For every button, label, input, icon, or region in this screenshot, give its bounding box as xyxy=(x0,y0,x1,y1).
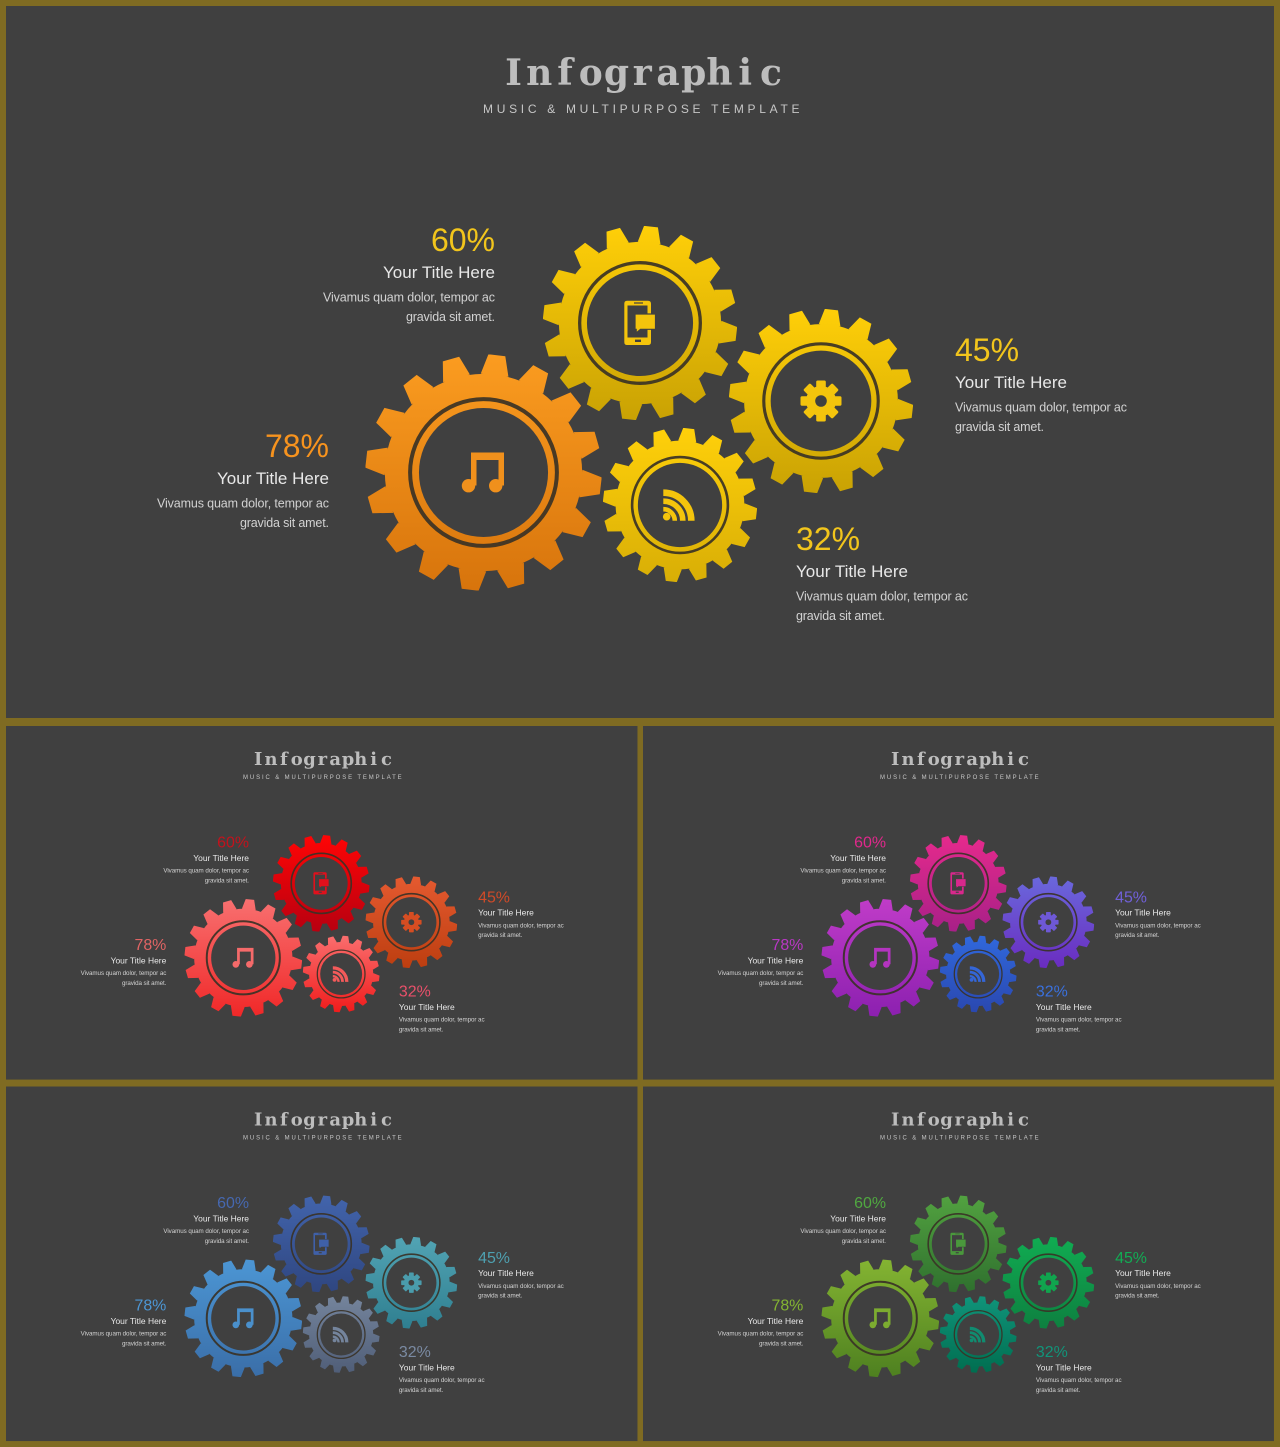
label: 45%: 45% xyxy=(478,889,510,906)
label: 32%: 32% xyxy=(1036,1344,1068,1361)
label: 78%: Your Title Here xyxy=(217,469,329,488)
panel: main yellow and orange gears xyxy=(6,6,1274,718)
label: 32%: 32% xyxy=(399,1344,431,1361)
label: 32% xyxy=(1036,983,1122,1033)
label: 60%: Your Title Here xyxy=(193,1213,249,1223)
label: 32%: Your Title Here xyxy=(1036,1362,1092,1372)
label: 78% xyxy=(81,937,167,987)
subtitle: MUSIC & MULTIPURPOSE TEMPLATE xyxy=(243,1135,402,1141)
gear: settings xyxy=(1003,1237,1094,1329)
label: 60%: Your Title Here xyxy=(193,853,249,863)
label: 78% xyxy=(718,937,804,987)
label: 78%: gravida sit amet. xyxy=(122,1340,167,1347)
label: 78%: Your Title Here xyxy=(111,1316,167,1326)
label: 32%: gravida sit amet. xyxy=(399,1026,444,1033)
label: 60%: Your Title Here xyxy=(383,263,495,282)
label: 32%: gravida sit amet. xyxy=(399,1387,444,1394)
label: 45%: Vivamus quam dolor, tempor ac xyxy=(478,922,564,929)
title: Infographic xyxy=(254,1109,392,1130)
label: 60% xyxy=(323,222,495,324)
label: 78%: 78% xyxy=(771,937,803,954)
label: 32%: Your Title Here xyxy=(399,1002,455,1012)
label: 60%: Vivamus quam dolor, tempor ac xyxy=(163,1228,249,1235)
label: 45%: 45% xyxy=(1115,1250,1147,1267)
label: 45%: gravida sit amet. xyxy=(1115,932,1160,939)
gear: music xyxy=(366,354,602,590)
label: 45% xyxy=(955,332,1127,434)
subtitle: MUSIC & MULTIPURPOSE TEMPLATE xyxy=(483,102,800,116)
label: 32%: 32% xyxy=(796,521,860,557)
label: 60%: Your Title Here xyxy=(830,1213,886,1223)
gear: settings xyxy=(366,1237,457,1329)
title: Infographic xyxy=(891,1109,1029,1130)
gear: settings xyxy=(1003,876,1094,968)
label: 78%: 78% xyxy=(265,428,329,464)
label: 32%: 32% xyxy=(1036,983,1068,1000)
gear: rss xyxy=(303,936,380,1012)
label: 60%: 60% xyxy=(217,835,249,852)
label: 78%: 78% xyxy=(134,937,166,954)
label: 60%: Vivamus quam dolor, tempor ac xyxy=(323,290,495,304)
gear: music xyxy=(185,899,302,1017)
label: 32%: Vivamus quam dolor, tempor ac xyxy=(399,1377,485,1384)
panel: magenta and blue gears xyxy=(643,726,1274,1080)
label: 78%: Vivamus quam dolor, tempor ac xyxy=(718,970,803,977)
label: 45%: Your Title Here xyxy=(955,373,1067,392)
label: 32% xyxy=(796,521,968,623)
label: 32% xyxy=(1036,1344,1122,1394)
label: 45% xyxy=(1115,889,1201,939)
label: 60%: 60% xyxy=(217,1195,249,1212)
label: 78%: gravida sit amet. xyxy=(122,980,167,987)
label: 78% xyxy=(81,1298,167,1347)
label: 60% xyxy=(800,835,886,884)
label: 45% xyxy=(1115,1250,1201,1300)
panel: red gears xyxy=(6,726,637,1080)
title: Infographic xyxy=(891,749,1029,770)
gear: phone xyxy=(273,1196,370,1292)
panel: green gears xyxy=(643,1086,1274,1441)
panel: blue gears xyxy=(6,1086,637,1441)
label: 32%: Vivamus quam dolor, tempor ac xyxy=(399,1017,485,1024)
label: 32%: Your Title Here xyxy=(399,1362,455,1372)
label: 60%: gravida sit amet. xyxy=(842,1238,886,1245)
label: 78%: gravida sit amet. xyxy=(759,980,804,987)
label: 60%: gravida sit amet. xyxy=(406,310,495,324)
label: 45%: Your Title Here xyxy=(478,1268,534,1278)
label: 60%: gravida sit amet. xyxy=(842,877,886,884)
gear: phone xyxy=(273,835,370,932)
label: 60%: gravida sit amet. xyxy=(205,877,249,884)
label: 60%: 60% xyxy=(854,835,886,852)
label: 78%: 78% xyxy=(134,1298,166,1315)
label: 45%: Your Title Here xyxy=(1115,1268,1171,1278)
subtitle: MUSIC & MULTIPURPOSE TEMPLATE xyxy=(243,775,402,781)
label: 45%: Vivamus quam dolor, tempor ac xyxy=(955,400,1127,414)
gear: settings xyxy=(366,876,457,968)
label: 32%: Vivamus quam dolor, tempor ac xyxy=(796,590,968,604)
label: 60% xyxy=(163,835,249,884)
label: 60% xyxy=(163,1195,249,1245)
label: 78% xyxy=(718,1298,804,1347)
label: 78%: Vivamus quam dolor, tempor ac xyxy=(157,496,329,510)
label: 78%: gravida sit amet. xyxy=(759,1340,804,1347)
label: 45%: Your Title Here xyxy=(1115,908,1171,918)
label: 60%: 60% xyxy=(431,222,495,258)
gear: music xyxy=(822,899,939,1017)
label: 32%: 32% xyxy=(399,983,431,1000)
subtitle: MUSIC & MULTIPURPOSE TEMPLATE xyxy=(880,775,1039,781)
label: 45% xyxy=(478,889,564,939)
gear: phone xyxy=(543,226,737,420)
label: 78%: Vivamus quam dolor, tempor ac xyxy=(81,970,166,977)
label: 32%: gravida sit amet. xyxy=(796,609,885,623)
label: 45%: Vivamus quam dolor, tempor ac xyxy=(1115,922,1201,929)
label: 45%: gravida sit amet. xyxy=(478,1293,523,1300)
gear: music xyxy=(822,1260,939,1377)
gear: rss xyxy=(303,1296,380,1373)
title: Infographic xyxy=(254,749,392,770)
label: 45%: 45% xyxy=(478,1250,510,1267)
label: 45%: gravida sit amet. xyxy=(478,932,523,939)
label: 60%: Vivamus quam dolor, tempor ac xyxy=(800,1228,886,1235)
label: 32% xyxy=(399,1344,485,1394)
label: 32% xyxy=(399,983,485,1033)
label: 32%: Your Title Here xyxy=(1036,1002,1092,1012)
label: 60%: 60% xyxy=(854,1195,886,1212)
label: 60%: Your Title Here xyxy=(830,853,886,863)
label: 45%: Vivamus quam dolor, tempor ac xyxy=(1115,1283,1201,1290)
label: 60%: Vivamus quam dolor, tempor ac xyxy=(163,868,249,875)
label: 32%: gravida sit amet. xyxy=(1036,1026,1081,1033)
label: 78%: Your Title Here xyxy=(748,1316,804,1326)
gear: phone xyxy=(910,1196,1007,1292)
label: 60%: gravida sit amet. xyxy=(205,1238,249,1245)
label: 32%: Your Title Here xyxy=(796,562,908,581)
label: 45%: 45% xyxy=(955,332,1019,368)
label: 32%: Vivamus quam dolor, tempor ac xyxy=(1036,1377,1122,1384)
label: 45%: Your Title Here xyxy=(478,908,534,918)
label: 78% xyxy=(157,428,329,530)
label: 78%: Your Title Here xyxy=(111,956,167,966)
label: 45%: gravida sit amet. xyxy=(1115,1293,1160,1300)
label: 78%: gravida sit amet. xyxy=(240,516,329,530)
label: 60%: Vivamus quam dolor, tempor ac xyxy=(800,868,886,875)
gear: rss xyxy=(603,428,757,582)
title: Infographic xyxy=(505,52,782,94)
gear: music xyxy=(185,1260,302,1377)
label: 78%: Vivamus quam dolor, tempor ac xyxy=(81,1331,166,1338)
gear: rss xyxy=(940,936,1016,1012)
label: 78%: Vivamus quam dolor, tempor ac xyxy=(718,1331,803,1338)
label: 45%: Vivamus quam dolor, tempor ac xyxy=(478,1283,564,1290)
label: 45%: gravida sit amet. xyxy=(955,420,1044,434)
label: 60% xyxy=(800,1195,886,1245)
label: 32%: gravida sit amet. xyxy=(1036,1387,1081,1394)
gear: settings xyxy=(729,309,913,493)
label: 45% xyxy=(478,1250,564,1300)
gear: rss xyxy=(940,1296,1016,1373)
label: 45%: 45% xyxy=(1115,889,1147,906)
subtitle: MUSIC & MULTIPURPOSE TEMPLATE xyxy=(880,1135,1039,1141)
label: 32%: Vivamus quam dolor, tempor ac xyxy=(1036,1017,1122,1024)
label: 78%: 78% xyxy=(771,1298,803,1315)
label: 78%: Your Title Here xyxy=(748,956,804,966)
gear: phone xyxy=(910,835,1007,932)
